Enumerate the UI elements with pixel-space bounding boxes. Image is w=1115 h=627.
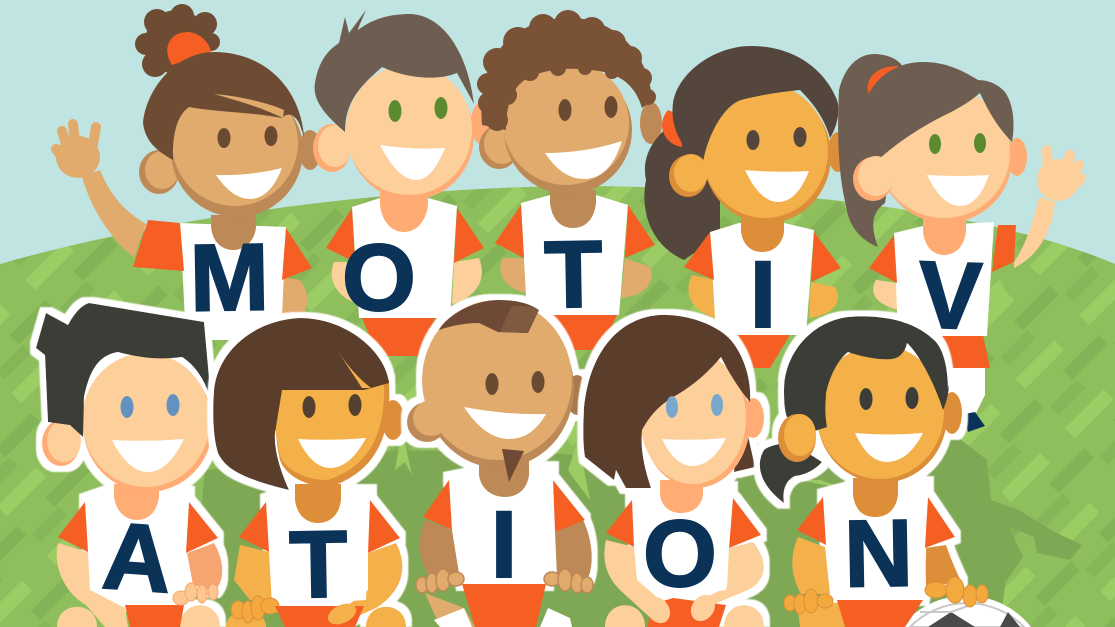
- letter N: N: [843, 500, 914, 608]
- eyes: [120, 396, 134, 418]
- left sleeve: [423, 480, 452, 530]
- right arm: [925, 545, 962, 585]
- sleeves: [869, 225, 1016, 283]
- face: [275, 380, 389, 487]
- shorts: [362, 318, 435, 356]
- neck: [479, 460, 529, 497]
- eyes: [860, 388, 872, 410]
- right sleeve: [186, 502, 218, 553]
- left ear: [407, 402, 447, 442]
- raised arm: [1014, 197, 1055, 268]
- letter M: M: [189, 224, 270, 332]
- soccer ball: [901, 596, 1031, 627]
- right ear: [742, 398, 764, 438]
- outlined body and head: [36, 303, 222, 627]
- hair tie: [167, 32, 211, 65]
- player: O bottom: [583, 315, 764, 627]
- neck: [923, 218, 966, 255]
- eyes: [302, 396, 316, 418]
- player: M: [56, 4, 321, 340]
- shirt: [352, 198, 457, 318]
- player: T: [477, 10, 662, 350]
- player: A: [36, 303, 222, 627]
- head: [424, 308, 574, 468]
- sleeves: [684, 232, 841, 282]
- right sleeve: [553, 480, 585, 532]
- smile: [380, 145, 445, 180]
- neck: [114, 484, 159, 520]
- kicking player shadow: [950, 435, 1082, 590]
- hair: [213, 318, 389, 490]
- letter T: T: [544, 222, 603, 329]
- right ear: [382, 400, 404, 440]
- bun: [135, 4, 220, 77]
- shirt: [631, 487, 732, 598]
- ponytail: [838, 54, 905, 247]
- right hand on ball: [925, 577, 988, 607]
- shorts: [275, 606, 364, 627]
- right arm: [700, 542, 764, 605]
- back hair right: [734, 400, 755, 472]
- player: V: [838, 54, 1081, 432]
- left hand: [231, 596, 279, 623]
- left knee: [57, 607, 97, 627]
- shirt: [894, 222, 994, 336]
- hair: [315, 10, 474, 132]
- ears: [139, 150, 179, 194]
- ears: [1007, 138, 1027, 176]
- lower arm: [281, 277, 307, 322]
- shirt: [180, 223, 286, 340]
- raised arm: [82, 170, 146, 258]
- letter T: T: [289, 512, 348, 619]
- right ear: [942, 392, 962, 434]
- smile: [298, 438, 366, 468]
- shorts: [125, 605, 184, 627]
- smile: [745, 170, 809, 202]
- hands: [641, 592, 675, 627]
- shirt: [449, 467, 553, 585]
- legs: [425, 593, 475, 627]
- hair: [143, 52, 304, 160]
- ears: [471, 102, 491, 144]
- left arm: [792, 537, 830, 594]
- arms: [332, 258, 482, 305]
- face: [171, 85, 303, 217]
- sleeves: [133, 220, 312, 280]
- right arm: [339, 543, 402, 622]
- shorts: [737, 333, 791, 368]
- back hair: [644, 110, 720, 260]
- right hand: [325, 600, 359, 627]
- left arm: [604, 540, 672, 622]
- neck: [741, 215, 784, 252]
- player: I bottom: [407, 300, 593, 627]
- letter I: I: [491, 492, 517, 598]
- smile: [216, 168, 282, 199]
- player: O: [313, 10, 491, 356]
- waving hand: [56, 124, 100, 178]
- left sleeve: [58, 502, 88, 552]
- smile: [112, 439, 184, 472]
- eyes: [666, 396, 678, 418]
- hair tie: [662, 110, 682, 147]
- smile: [662, 438, 726, 466]
- face: [83, 358, 213, 492]
- knees: [180, 605, 220, 627]
- sleeves: [326, 208, 484, 263]
- ponytail: [760, 444, 822, 503]
- left ear: [42, 420, 80, 466]
- face: [880, 93, 1012, 223]
- green hill: [0, 180, 1115, 627]
- right ear: [202, 400, 222, 440]
- neck: [211, 215, 256, 250]
- curly hair: [477, 10, 656, 131]
- shirt: [521, 195, 628, 315]
- letter O: O: [342, 225, 416, 331]
- goatee: [502, 449, 524, 482]
- near ear: [669, 155, 707, 197]
- left arm: [234, 545, 272, 605]
- smile: [927, 175, 989, 206]
- right ear: [566, 375, 588, 415]
- eyes: [486, 373, 498, 395]
- shirt: [710, 223, 814, 335]
- shorts: [648, 598, 726, 627]
- lower arm: [873, 280, 899, 310]
- waving hand: [1037, 150, 1081, 201]
- arms: [688, 275, 838, 318]
- hair: [784, 316, 949, 432]
- ears: [828, 132, 848, 172]
- mohawk: [439, 300, 539, 333]
- shorts: [941, 335, 990, 368]
- near ear: [778, 414, 816, 462]
- letter A: A: [99, 503, 175, 613]
- smile: [545, 141, 622, 179]
- player: I: [644, 46, 848, 368]
- arms: [500, 258, 651, 298]
- left knee: [605, 605, 645, 627]
- left sleeve: [606, 500, 634, 547]
- right sleeve: [368, 500, 400, 553]
- leg and boot: [950, 368, 985, 415]
- player: N bottom: [760, 316, 1031, 627]
- left hand: [784, 589, 833, 614]
- shirt: [266, 490, 371, 606]
- hair: [583, 315, 750, 488]
- face: [348, 70, 474, 200]
- right knee: [366, 607, 406, 627]
- shirt: [823, 482, 928, 600]
- hand: [173, 583, 218, 605]
- grass tufts: [395, 280, 1010, 500]
- eyes: [929, 134, 941, 154]
- left arm: [57, 543, 128, 627]
- neck: [295, 484, 341, 523]
- neck: [550, 190, 596, 228]
- right sleeve: [729, 498, 761, 548]
- face: [817, 349, 947, 483]
- left sleeve: [239, 502, 269, 552]
- smile: [855, 433, 923, 462]
- face: [504, 66, 632, 194]
- player: T bottom: [213, 318, 406, 627]
- near ear: [853, 157, 893, 201]
- right sleeve: [925, 497, 955, 548]
- hair: [36, 303, 211, 437]
- ground shadow behind players: [190, 435, 1005, 627]
- face: [703, 89, 831, 223]
- eyes: [218, 128, 230, 148]
- neck: [660, 480, 703, 513]
- hands: [416, 569, 593, 593]
- shirt: [85, 490, 189, 606]
- smile: [464, 407, 546, 439]
- right knee: [724, 605, 764, 627]
- letter O: O: [643, 501, 717, 607]
- shorts: [837, 600, 923, 627]
- face: [642, 356, 750, 488]
- hair tie: [868, 66, 898, 98]
- shorts: [462, 584, 546, 627]
- neck: [380, 192, 428, 232]
- ears: [640, 102, 662, 144]
- eyes: [558, 99, 572, 121]
- left leg: [798, 602, 845, 627]
- right arm: [555, 520, 592, 578]
- letter I: I: [750, 242, 776, 348]
- eyes: [746, 130, 760, 150]
- neck: [853, 478, 898, 517]
- left sleeve: [797, 497, 826, 545]
- shorts: [547, 313, 618, 350]
- sleeves: [495, 205, 655, 258]
- eyes: [388, 100, 402, 122]
- right arm: [187, 543, 222, 592]
- left arm: [420, 520, 460, 580]
- left knee: [226, 611, 266, 627]
- letter V: V: [917, 242, 984, 350]
- hair: [672, 46, 838, 162]
- hair: [859, 62, 1014, 165]
